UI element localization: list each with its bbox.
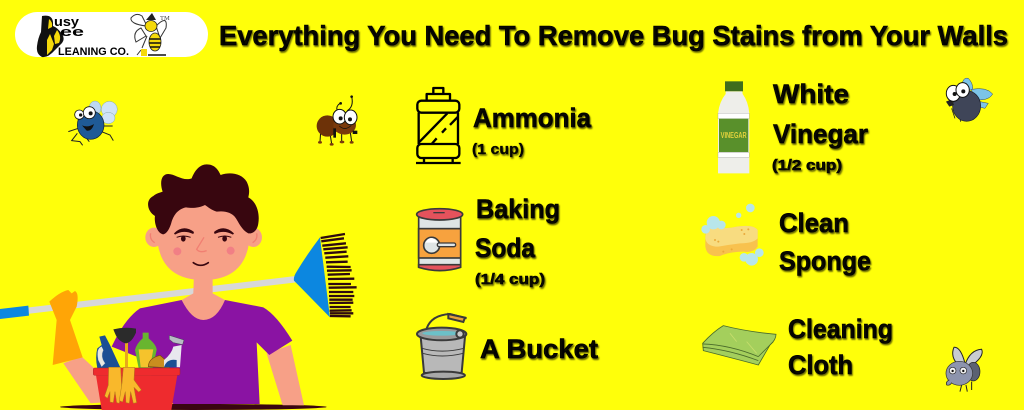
shirt	[112, 300, 292, 404]
icon: cleaning cloth	[703, 326, 776, 365]
text: ammonia: Ammonia	[473, 103, 592, 133]
text: ammonia: (1 cup)	[472, 141, 524, 158]
icon: blue bug	[68, 101, 117, 145]
arm left	[63, 357, 103, 403]
arm right	[267, 345, 304, 405]
text: cleaning cloth: Cleaning	[788, 314, 893, 344]
glove	[49, 290, 83, 365]
text: white vinegar: Vinegar	[773, 119, 868, 149]
icon: ammonia	[416, 88, 461, 163]
icon: sponge	[701, 204, 764, 266]
icon: dark fly	[946, 78, 993, 122]
text: clean sponge: Sponge	[779, 246, 871, 276]
text: cleaning cloth: Cloth	[788, 350, 853, 380]
ears	[145, 228, 163, 247]
title: Everything You Need To Remove Bug Stains from Your Walls	[219, 20, 1008, 51]
cleaning supplies bucket	[93, 328, 184, 410]
logo	[15, 12, 208, 58]
hair	[148, 164, 259, 234]
text: white vinegar: White	[773, 79, 849, 109]
text: white vinegar: (1/2 cup)	[772, 157, 842, 174]
icon: bucket	[417, 314, 467, 379]
icon: baking soda	[417, 209, 463, 271]
logo: LEANING CO.	[58, 46, 129, 58]
text: a bucket: A Bucket	[480, 334, 598, 364]
logo: usy	[54, 14, 80, 29]
text: ammonia	[472, 103, 592, 158]
logo: ee	[60, 24, 84, 39]
text: clean sponge: Clean	[779, 208, 849, 238]
text: baking soda: (1/4 cup)	[475, 271, 545, 288]
head	[157, 203, 250, 280]
broom	[0, 234, 357, 319]
icon: grey fly	[946, 347, 982, 392]
face	[173, 228, 235, 265]
text: baking soda	[475, 194, 560, 288]
neck	[182, 273, 225, 320]
text: baking soda: Baking	[476, 194, 560, 224]
text: baking soda: Soda	[475, 233, 536, 263]
logo: TM	[160, 15, 170, 22]
floor shadow	[60, 404, 327, 410]
text: white vinegar	[772, 79, 868, 174]
text: cleaning cloth	[788, 314, 893, 380]
icon: vinegar bottle	[718, 81, 749, 173]
illustration: man with broom	[0, 164, 357, 410]
icon: vinegar bottle: VINEGAR	[721, 131, 747, 140]
icon: brown ant	[317, 95, 357, 146]
text: clean sponge	[779, 208, 871, 276]
